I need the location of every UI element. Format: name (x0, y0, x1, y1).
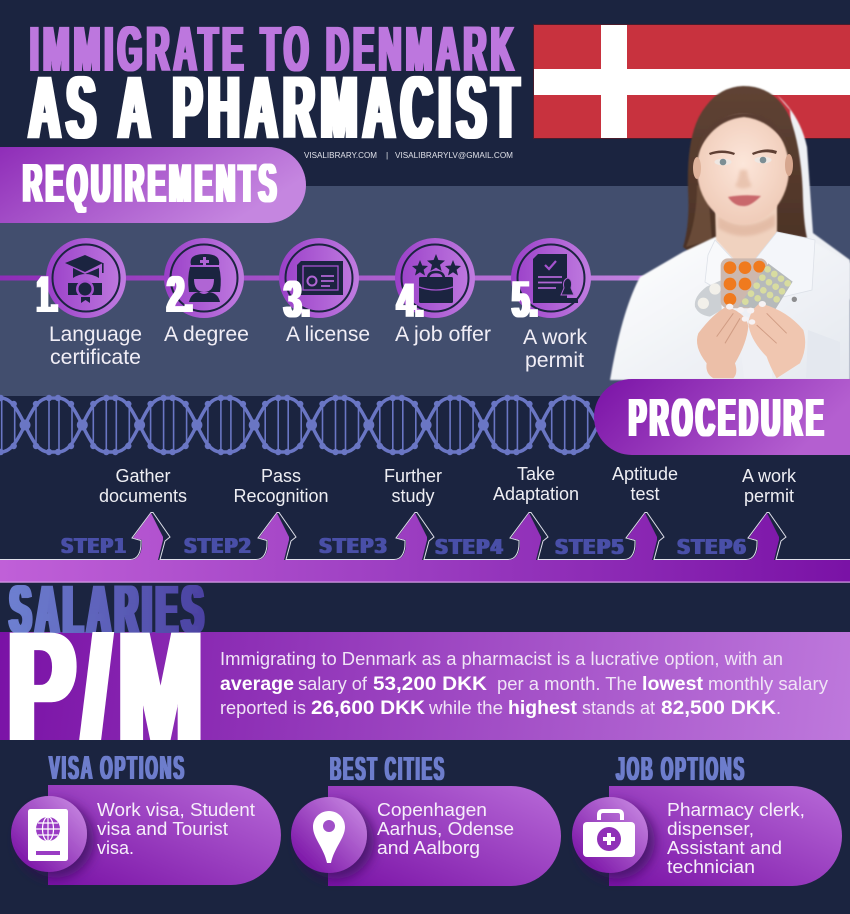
visa options text (97, 799, 255, 858)
photo: pharmacist holding medicine (610, 86, 850, 380)
panel: visa options (11, 749, 281, 885)
requirement labels: A degree (164, 323, 249, 346)
procedure step labels (99, 464, 797, 506)
heading: procedure (594, 379, 850, 455)
requirement numbers (37, 266, 538, 329)
icon: license (279, 238, 359, 318)
best cities text: and Aalborg (377, 837, 480, 858)
visa options text: Work visa, Student (97, 799, 255, 820)
icon: first aid kit (572, 797, 648, 873)
salary description: . (776, 697, 781, 718)
Danish flag (534, 24, 850, 138)
visa options text: visa. (97, 837, 134, 858)
salary description: Immigrating to Denmark as a pharmacist is a lucrative option, with an (220, 648, 783, 669)
requirement numbers: 2. (167, 266, 193, 324)
best cities text: Aarhus, Odense (377, 818, 514, 839)
salary description: salary of (298, 673, 368, 694)
heading: requirements: REQUIREMENTS (23, 152, 280, 214)
procedure step labels: Aptitude (612, 464, 678, 484)
requirement labels (49, 323, 587, 372)
job options text (667, 799, 805, 877)
procedure step labels: Further (384, 466, 442, 486)
job options text: Pharmacy clerk, (667, 799, 805, 820)
procedure step numbers: STEP1 (61, 534, 127, 558)
website and email line (304, 150, 513, 160)
heading: per month: P/M (8, 600, 210, 774)
salary description: monthly salary (708, 673, 829, 694)
procedure step labels: Pass (261, 466, 301, 486)
procedure step labels: permit (744, 486, 794, 506)
requirement labels: certificate (50, 346, 141, 369)
text: SALARIES (10, 571, 208, 648)
panel: job options (572, 750, 842, 886)
requirement labels: Language (49, 323, 142, 346)
procedure step numbers: STEP4 (435, 535, 504, 559)
requirement labels: permit (525, 349, 584, 372)
procedure step numbers: STEP3 (319, 534, 388, 558)
panel: best cities (291, 750, 561, 886)
requirement numbers: 1. (37, 266, 58, 324)
procedure step numbers: STEP6 (677, 535, 747, 559)
salary description (220, 648, 829, 719)
icon: work permit (511, 238, 591, 318)
salary description: average (220, 674, 294, 695)
requirement labels: A license (286, 323, 370, 346)
procedure step labels: A work (742, 466, 797, 486)
salary band (0, 632, 850, 740)
procedure step labels: test (630, 484, 660, 504)
salary description: highest (508, 698, 578, 719)
requirements connector line (0, 276, 645, 280)
procedure step labels: Take (517, 464, 555, 484)
best cities text (377, 799, 514, 858)
salary description: 53,200 DKK (373, 674, 487, 695)
salary description: lowest (642, 674, 704, 695)
panel: visa options: VISA OPTIONS (49, 749, 186, 786)
best cities text: Copenhagen (377, 799, 487, 820)
procedure step labels: Recognition (233, 486, 329, 506)
visa options text: visa and Tourist (97, 818, 228, 839)
decorative DNA strand (0, 395, 598, 455)
procedure arrow timeline (0, 512, 850, 583)
requirement numbers: 4. (397, 275, 424, 328)
procedure step labels: documents (99, 486, 187, 506)
job options text: dispenser, (667, 818, 754, 839)
procedure step labels: Gather (115, 466, 171, 486)
title (29, 13, 525, 157)
website and email line: | (386, 150, 388, 160)
salary description: 26,600 DKK (311, 698, 425, 719)
procedure step labels: Adaptation (493, 484, 579, 504)
salary description: stands at (582, 697, 655, 718)
procedure step numbers: STEP5 (555, 535, 625, 559)
heading: requirements (0, 147, 306, 223)
requirement labels: A work (523, 326, 587, 349)
procedure step labels: study (391, 486, 435, 506)
job options text: Assistant and (667, 837, 782, 858)
website and email line: VISALIBRARY.COM (304, 150, 377, 160)
icon: job offer (395, 238, 475, 318)
procedure step numbers (61, 534, 747, 559)
icon: language certificate (46, 238, 126, 318)
website and email line: VISALIBRARYLV@GMAIL.COM (395, 150, 513, 160)
procedure step numbers: STEP2 (184, 534, 252, 558)
salary description: reported is (220, 697, 306, 718)
panel: best cities: BEST CITIES (330, 750, 446, 787)
requirement labels: A job offer (395, 323, 491, 346)
salary description: 82,500 DKK (661, 698, 776, 719)
icon: location pin (291, 797, 367, 873)
icon: passport (11, 796, 87, 872)
job options text: technician (667, 856, 755, 877)
salary description: per a month. The (497, 673, 637, 694)
icon: degree nurse (164, 238, 244, 318)
requirement numbers: 5. (512, 271, 538, 329)
panel: requirements background (0, 186, 850, 396)
salary description: while the (428, 697, 503, 718)
requirement numbers: 3. (284, 271, 310, 329)
